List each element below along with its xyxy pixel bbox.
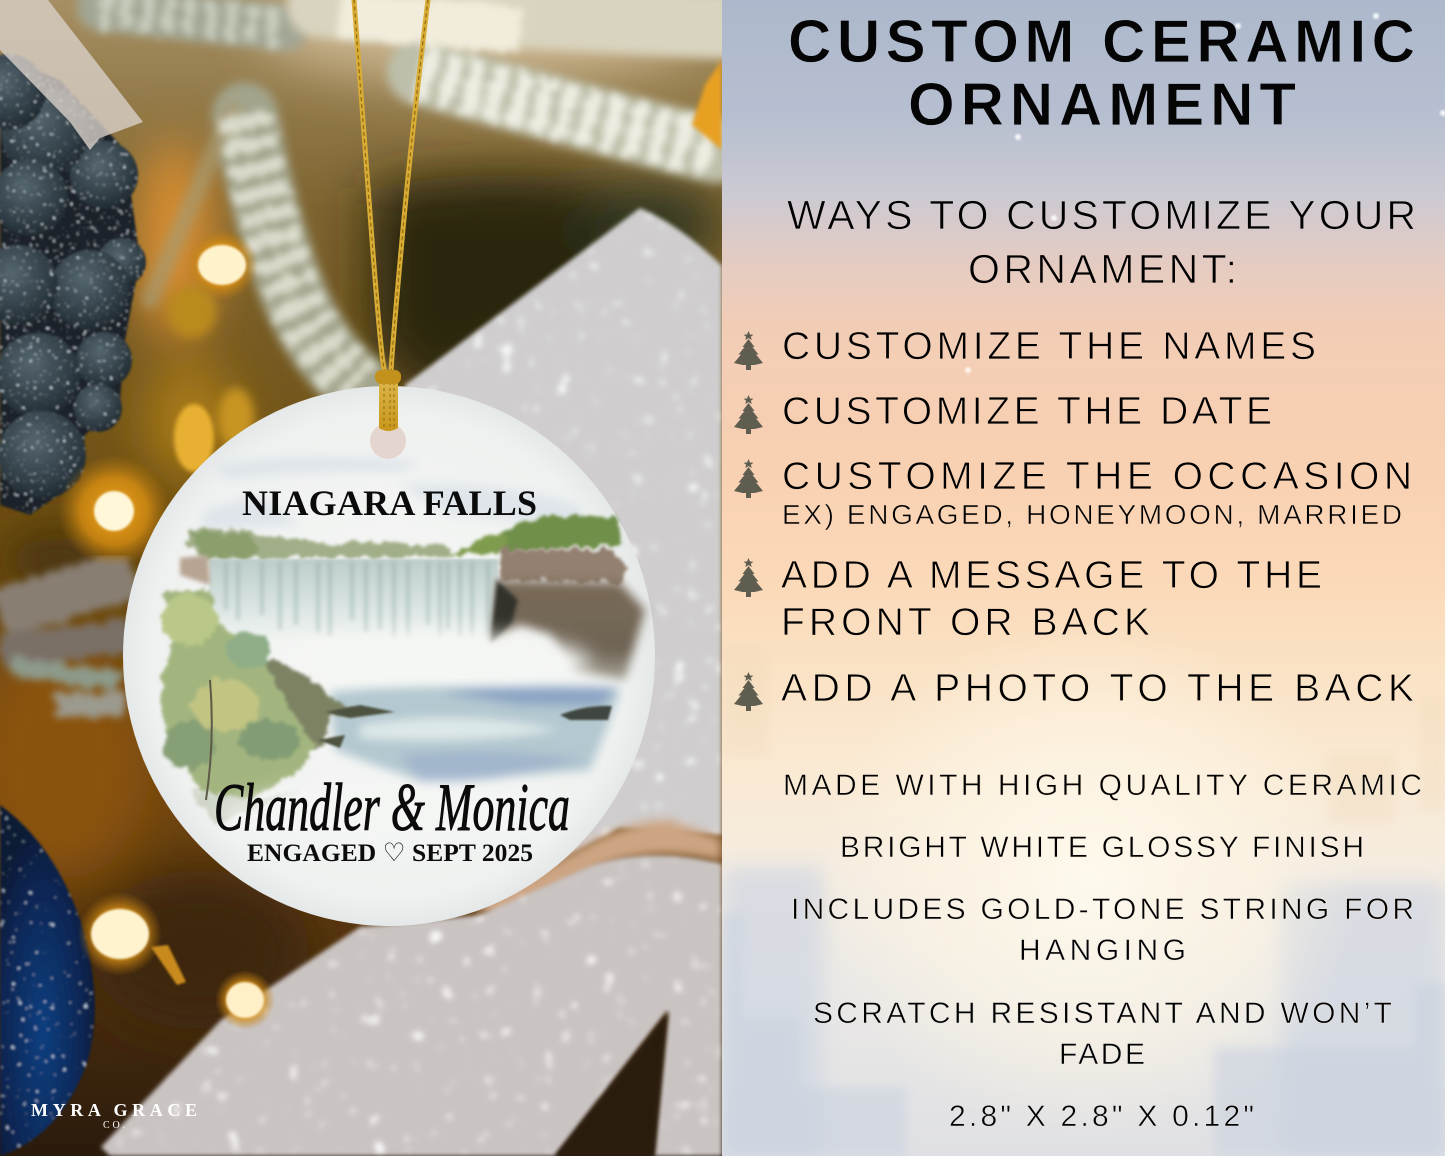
watermark xyxy=(31,1100,197,1131)
icon: tree bullet xyxy=(734,672,763,711)
list item: message xyxy=(781,554,1322,644)
list item: message: FRONT OR BACK xyxy=(781,601,1150,644)
icon: tree bullet xyxy=(734,558,763,597)
hole xyxy=(370,423,406,459)
occasion line: ENGAGED ♡ SEPT 2025 xyxy=(247,838,533,868)
feature: string: INCLUDES GOLD-TONE STRING FOR xyxy=(791,893,1414,926)
panel: product details background xyxy=(722,0,1445,1156)
ornament xyxy=(123,370,655,926)
branch shading xyxy=(100,5,720,385)
white glitter ribbon xyxy=(405,208,722,925)
feature: durability xyxy=(813,997,1392,1071)
feature: finish: BRIGHT WHITE GLOSSY FINISH xyxy=(840,831,1364,864)
river xyxy=(330,686,620,782)
list item: date: CUSTOMIZE THE DATE xyxy=(782,390,1272,433)
gold hanging string xyxy=(354,0,428,372)
gold knot xyxy=(375,370,401,431)
list item: message: ADD A MESSAGE TO THE xyxy=(781,554,1322,597)
frosted pine branches xyxy=(100,5,720,385)
title: CUSTOM CERAMIC xyxy=(788,8,1415,75)
heading: ways to customize: ORNAMENT: xyxy=(968,246,1237,292)
watermark: MYRA GRACE xyxy=(31,1100,197,1120)
sky wash xyxy=(200,457,585,530)
central glow xyxy=(820,620,1360,1140)
ornament title: NIAGARA FALLS xyxy=(242,483,537,523)
sky stars xyxy=(965,13,1445,373)
blue glitter bauble lower left xyxy=(0,805,95,1156)
icon: tree bullet xyxy=(734,459,763,498)
bokeh lights xyxy=(58,60,722,1030)
heading: ways to customize xyxy=(787,192,1416,292)
blue glitter baubles xyxy=(0,54,146,515)
feature: size: 2.8" X 2.8" X 0.12" xyxy=(949,1100,1254,1133)
amber and dark background glow xyxy=(0,0,720,1030)
list item note: occasion examples: EX) ENGAGED, HONEYMOON, MARRIED xyxy=(782,499,1402,530)
foreground tree xyxy=(160,590,315,825)
faint distant skyline xyxy=(723,867,1445,1156)
warm skyline towers xyxy=(723,647,1445,823)
right forest xyxy=(452,515,620,556)
small rock left xyxy=(180,555,210,585)
branch needles xyxy=(100,8,715,385)
names: Chandler & Monica xyxy=(214,769,570,845)
dark gap between ribbons xyxy=(555,1012,668,1156)
feature: ceramic: MADE WITH HIGH QUALITY CERAMIC xyxy=(783,769,1422,802)
hillside xyxy=(264,656,353,752)
heading: ways to customize: WAYS TO CUSTOMIZE YOUR xyxy=(787,192,1416,238)
peach ribbon edge xyxy=(470,820,722,920)
feature: durability: FADE xyxy=(1059,1038,1145,1071)
lower glitter ribbon xyxy=(101,855,722,1156)
icon: tree bullet xyxy=(734,395,763,434)
list: customization options xyxy=(734,325,1414,711)
list item: occasion: CUSTOMIZE THE OCCASION xyxy=(782,455,1412,498)
text block: product features xyxy=(783,769,1422,1133)
skyline blocks xyxy=(723,913,1445,1156)
rock right xyxy=(560,706,612,720)
title: ORNAMENT xyxy=(908,71,1296,138)
cliff face xyxy=(492,580,645,680)
title xyxy=(788,8,1415,138)
mist xyxy=(391,620,600,676)
waterfall xyxy=(209,559,498,643)
lower left frosted branch xyxy=(0,575,135,705)
photo panel: Christmas tree background xyxy=(0,0,722,1156)
cliff top xyxy=(500,549,628,582)
sheer ribbon xyxy=(0,0,143,150)
list item: photo: ADD A PHOTO TO THE BACK xyxy=(781,667,1414,710)
feature: durability: SCRATCH RESISTANT AND WON’T xyxy=(813,997,1392,1030)
text glow xyxy=(221,777,448,820)
left treeline xyxy=(187,529,455,560)
tree trunk xyxy=(206,680,212,800)
list item: names: CUSTOMIZE THE NAMES xyxy=(782,325,1316,368)
feature: string xyxy=(791,893,1414,967)
watermark: CO. xyxy=(103,1120,125,1131)
foreground rocks xyxy=(318,705,395,748)
shadow at falls edge xyxy=(490,580,518,645)
feature: string: HANGING xyxy=(1019,934,1186,967)
icon: tree bullet xyxy=(734,331,763,370)
